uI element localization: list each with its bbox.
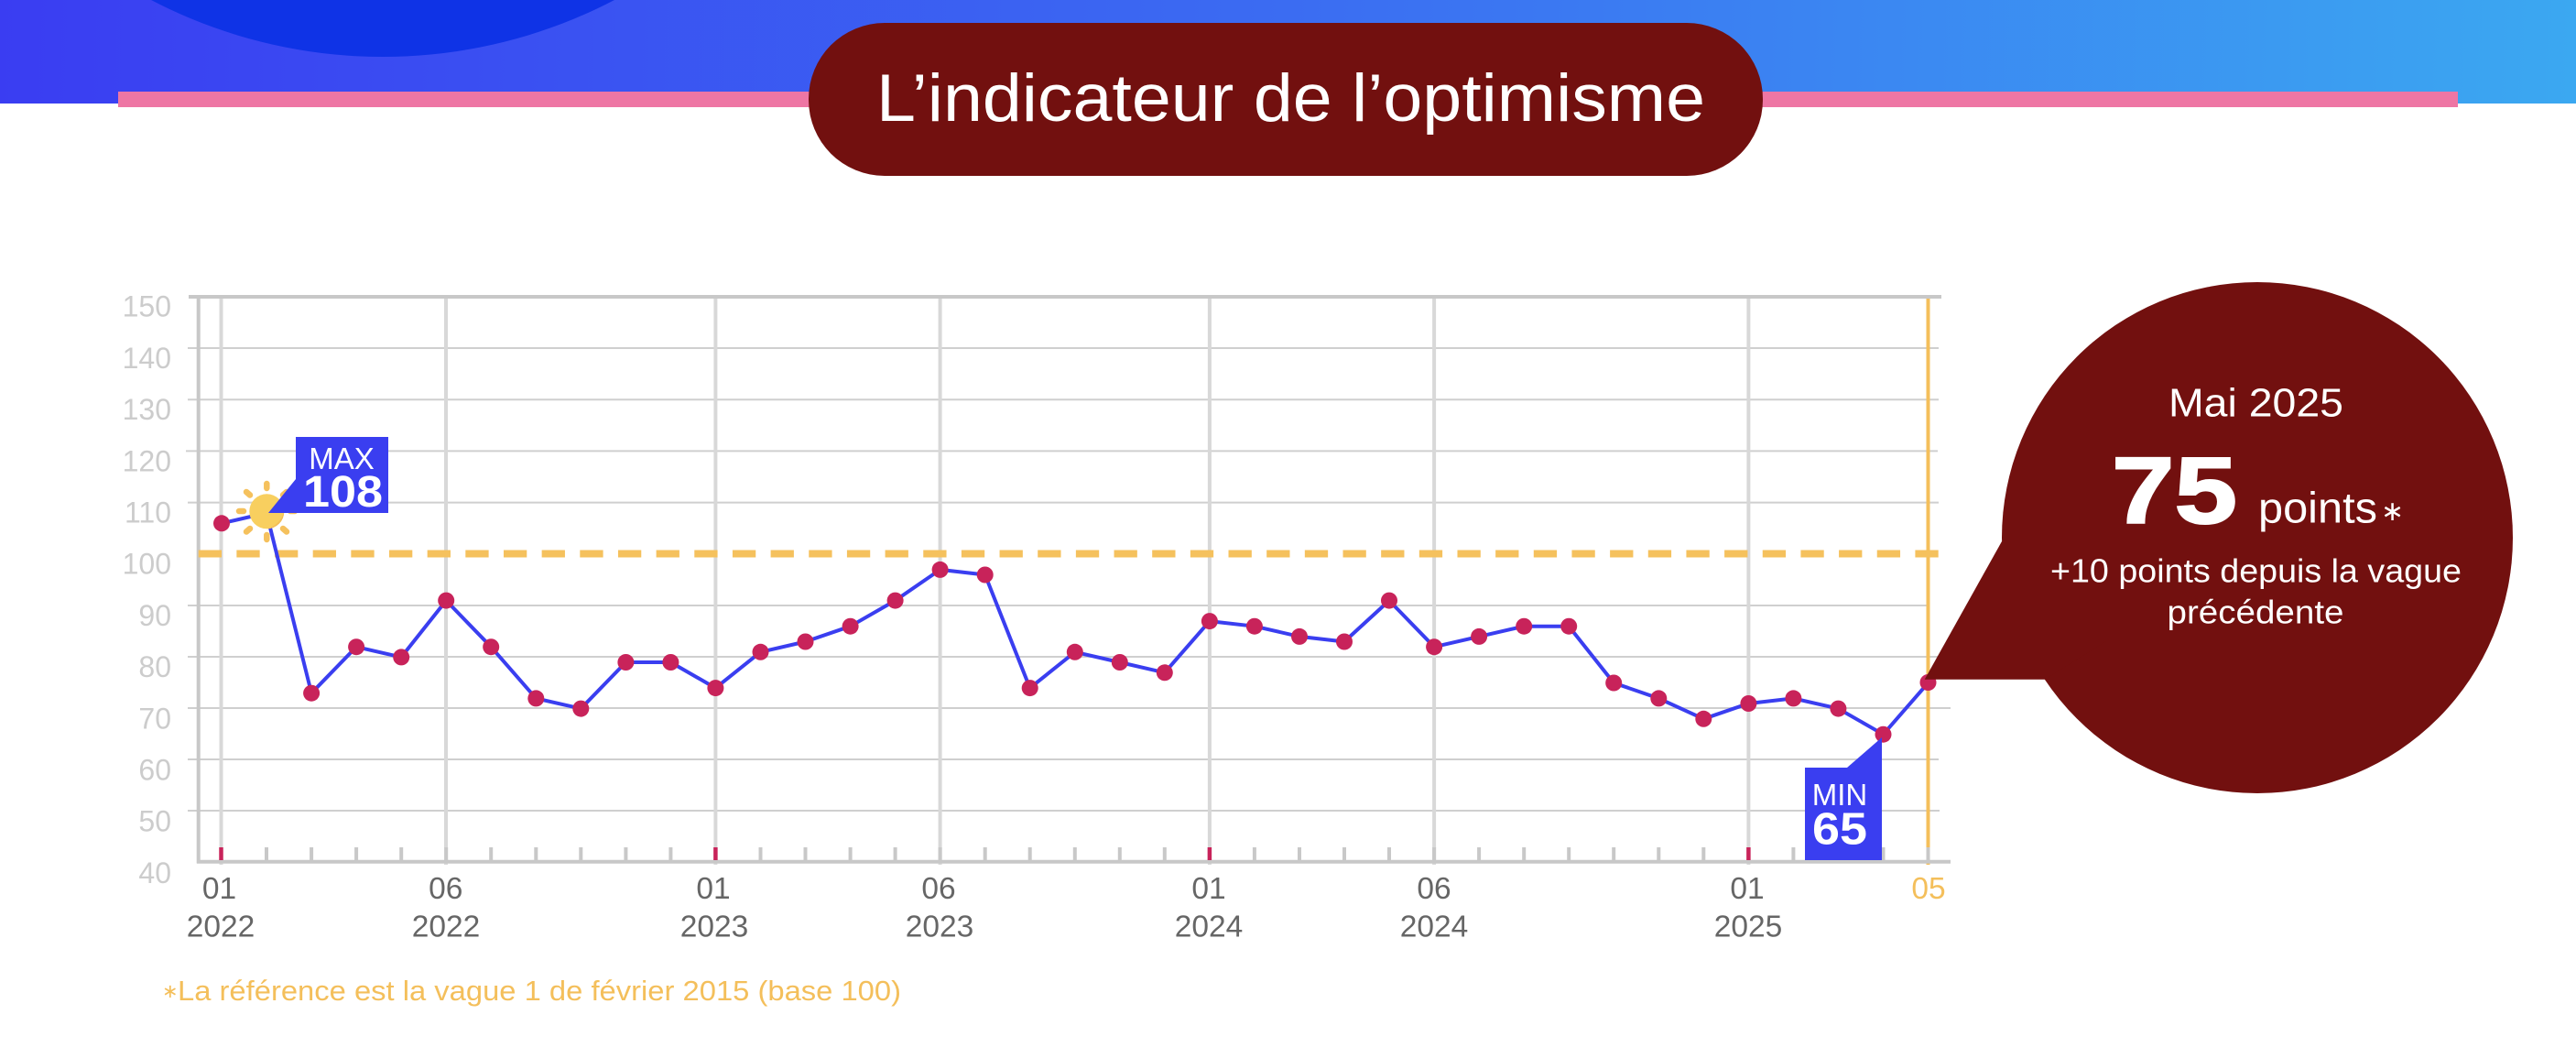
callout: May 2025 bubble: 75: [2112, 438, 2237, 543]
callout: May 2025 bubble: +10 points depuis la vague: [2050, 552, 2462, 590]
callout: MIN 65: 65: [1812, 805, 1867, 855]
callout: May 2025 bubble: ∗: [2381, 496, 2404, 527]
y axis labels: 40: [138, 856, 171, 889]
header band: [0, 0, 2576, 107]
x axis labels: 2022: [187, 911, 255, 943]
x axis labels: 2024: [1400, 911, 1468, 943]
y axis labels: 110: [125, 496, 171, 529]
y axis labels: 130: [123, 393, 171, 426]
icon: sun at maximum point: [239, 484, 295, 540]
vertical grid lines: [222, 297, 1748, 865]
current month marker line: [1927, 297, 1930, 865]
x axis labels: 05: [1911, 872, 1946, 906]
y axis labels: 90: [138, 599, 171, 632]
x axis labels: 2023: [680, 911, 748, 943]
y axis labels: 120: [123, 444, 171, 477]
x axis labels: 2022: [412, 911, 480, 943]
x axis labels: 01: [1191, 872, 1226, 906]
y axis labels: 100: [123, 548, 171, 581]
y axis labels: 50: [138, 805, 171, 838]
x axis labels: 01: [202, 872, 236, 906]
base 100 dashed reference line: [199, 550, 1939, 557]
callout: May 2025 bubble: Mai 2025: [2168, 380, 2343, 425]
callout: May 2025 bubble: points: [2258, 484, 2377, 532]
data points: [213, 515, 1936, 743]
x axis labels: 01: [1730, 872, 1765, 906]
y axis labels: 70: [138, 702, 171, 735]
x axis labels: [187, 872, 1946, 943]
callout: MAX 108: [268, 437, 388, 517]
data line: [222, 513, 1929, 735]
y axis labels: 80: [138, 650, 171, 683]
x axis labels: 2023: [906, 911, 973, 943]
callout: MAX 108: MAX: [309, 442, 375, 475]
footnote: La référence est la vague 1 de février 2015 (base 100): [178, 975, 901, 1007]
callout: May 2025 bubble: précédente: [2167, 594, 2344, 631]
x axis labels: 01: [696, 872, 731, 906]
y axis labels: 60: [138, 753, 171, 786]
y axis labels: [123, 290, 171, 889]
footnote: ∗: [162, 981, 179, 1002]
callout: May 2025 bubble: [1925, 282, 2513, 793]
title pill: [809, 23, 1763, 176]
line chart: [123, 282, 2513, 943]
month ticks: [266, 847, 1929, 861]
title pill: L’indicateur de l’optimisme: [876, 61, 1705, 136]
y axis labels: 150: [123, 290, 171, 323]
x axis labels: 2025: [1714, 911, 1782, 943]
callout: MIN 65: [1805, 737, 1882, 860]
x axis labels: 06: [921, 872, 956, 906]
x axis labels: 06: [1417, 872, 1451, 906]
callout: MIN 65: MIN: [1812, 778, 1867, 812]
callout: MAX 108: 108: [303, 468, 383, 517]
x axis labels: 2024: [1175, 911, 1243, 943]
chart frame: [189, 295, 1951, 863]
y axis labels: 140: [123, 342, 171, 375]
january ticks: [222, 847, 1748, 860]
x axis labels: 06: [429, 872, 462, 906]
horizontal grid lines: [186, 348, 1951, 811]
